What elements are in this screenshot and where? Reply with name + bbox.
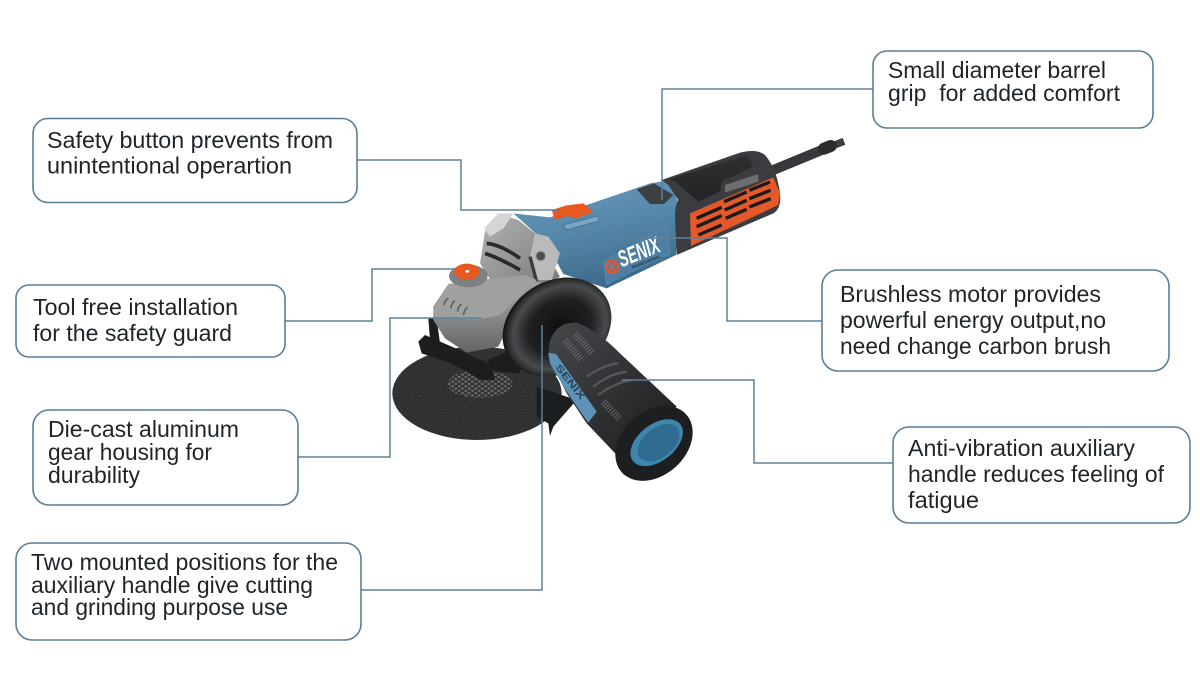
handle end cap (600, 391, 708, 496)
callout: tool free installation: Tool free installation (33, 294, 238, 320)
knurled nut (448, 370, 512, 398)
auxiliary handle (548, 323, 677, 458)
leader lines (285, 89, 893, 590)
gear housing, die-cast (433, 275, 547, 353)
callout: barrel grip: Small diameter barrel (888, 57, 1106, 83)
auxiliary handle: SENIX (553, 362, 588, 402)
callout: brushless motor (822, 270, 1169, 371)
grinder illustration (392, 141, 844, 496)
callout: two mounted positions: auxiliary handle give cutting (31, 572, 313, 598)
safety button (552, 203, 593, 220)
callout: brushless motor: powerful energy output,no (840, 307, 1106, 333)
cutting disc (392, 347, 562, 440)
power cord (773, 141, 844, 170)
callout: barrel grip: grip for added comfort (888, 80, 1121, 106)
rear housing (662, 151, 780, 255)
motor body, blue (513, 180, 679, 288)
guard release knob (449, 264, 488, 287)
callout: two mounted positions: and grinding purpose use (31, 594, 288, 620)
callout: two mounted positions (16, 543, 361, 640)
brand panel (603, 227, 670, 284)
callout: die-cast housing (33, 410, 298, 505)
safety guard (418, 318, 577, 436)
callout: anti-vibration handle: fatigue (908, 487, 979, 513)
orange vent (690, 177, 780, 246)
gear housing top (480, 213, 560, 290)
brand panel: SENIX (614, 231, 665, 272)
callout: safety button (33, 118, 357, 202)
callout: die-cast housing: Die-cast aluminum (48, 416, 239, 442)
switch slot (563, 216, 601, 230)
callout: anti-vibration handle: handle reduces feeling of (908, 461, 1165, 487)
barrel grip patch (637, 183, 673, 204)
callout: barrel grip (873, 51, 1153, 128)
callout: safety button: Safety button prevents from (47, 127, 333, 153)
callout: anti-vibration handle: Anti-vibration auxiliary (908, 435, 1136, 461)
callout: brushless motor: Brushless motor provides (840, 281, 1101, 307)
callout: brushless motor: need change carbon brush (840, 333, 1111, 359)
callout: tool free installation: for the safety guard (33, 320, 232, 346)
brand panel: PROFESSIONAL (631, 254, 662, 270)
handle guard flange (484, 258, 630, 396)
callout: die-cast housing: durability (48, 462, 140, 488)
callout: safety button: unintentional operartion (47, 152, 292, 178)
callout: anti-vibration handle (893, 427, 1190, 523)
callout: two mounted positions: Two mounted positions for the (31, 549, 338, 575)
callout: die-cast housing: gear housing for (48, 439, 212, 465)
callout: tool free installation (16, 285, 285, 357)
